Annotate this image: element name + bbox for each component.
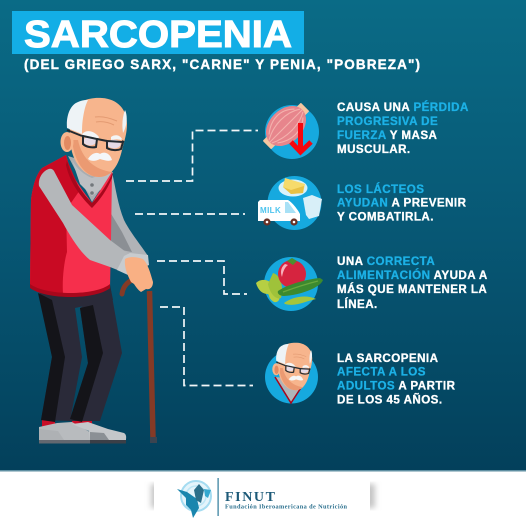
socks — [42, 420, 92, 428]
text: age: DE LOS 45 AÑOS. — [337, 394, 443, 406]
text: muscle loss: FUERZA Y MASA — [337, 129, 437, 142]
cucumber — [278, 278, 323, 296]
connector: man to muscle icon — [126, 130, 258, 181]
leaves — [256, 280, 280, 302]
connector: man to food icon — [157, 261, 247, 294]
subtitle: (DEL GRIEGO SARX, "CARNE" Y PENIA, "POBREZA") — [24, 57, 420, 72]
text: nutrition: LÍNEA. — [337, 298, 378, 311]
text: muscle loss: MUSCULAR. — [337, 143, 411, 156]
text: dairy: AYUDAN A PREVENIR — [337, 196, 466, 210]
text: age: LA SARCOPENIA — [337, 352, 439, 365]
shoes — [39, 422, 126, 444]
tomato — [278, 260, 306, 288]
neck and collar — [68, 156, 113, 202]
footer — [0, 470, 526, 526]
milk truck: MILK — [260, 206, 281, 215]
trousers — [38, 285, 122, 422]
text: nutrition: ALIMENTACIÓN AYUDA A — [337, 269, 487, 282]
text: dairy: Y COMBATIRLA. — [337, 210, 434, 224]
head — [60, 98, 127, 177]
icon: dairy products — [258, 176, 322, 230]
text: nutrition: UNA CORRECTA — [337, 255, 435, 268]
text: nutrition: MÁS QUE MANTENER LA — [337, 283, 487, 296]
logo: FINUT — [177, 478, 347, 518]
logo: FINUT: Fundación Iberoamericana de Nutrición — [225, 504, 347, 510]
logo emblem — [177, 481, 211, 518]
text: age: ADULTOS A PARTIR — [337, 380, 455, 392]
text: muscle loss: CAUSA UNA PÉRDIDA — [337, 101, 468, 114]
icon: healthy food — [256, 257, 323, 311]
title banner: SARCOPENIA — [24, 14, 292, 56]
cane — [122, 279, 157, 443]
text: dairy: LOS LÁCTEOS — [337, 183, 424, 196]
near arm — [39, 169, 149, 275]
carton — [303, 195, 322, 219]
icon: muscle with down arrow — [255, 95, 319, 159]
icon: elderly man portrait — [265, 343, 318, 404]
vest — [30, 155, 113, 297]
hand — [125, 257, 153, 292]
text: muscle loss: PROGRESIVA DE — [337, 115, 438, 128]
text: age: AFECTA A LOS — [337, 366, 426, 378]
far arm — [108, 172, 148, 262]
illustration: elderly man with cane — [30, 98, 157, 444]
connector: man to portrait icon — [160, 307, 253, 386]
connector: man to dairy icon — [135, 213, 245, 215]
logo: FINUT: FINUT — [225, 490, 276, 505]
